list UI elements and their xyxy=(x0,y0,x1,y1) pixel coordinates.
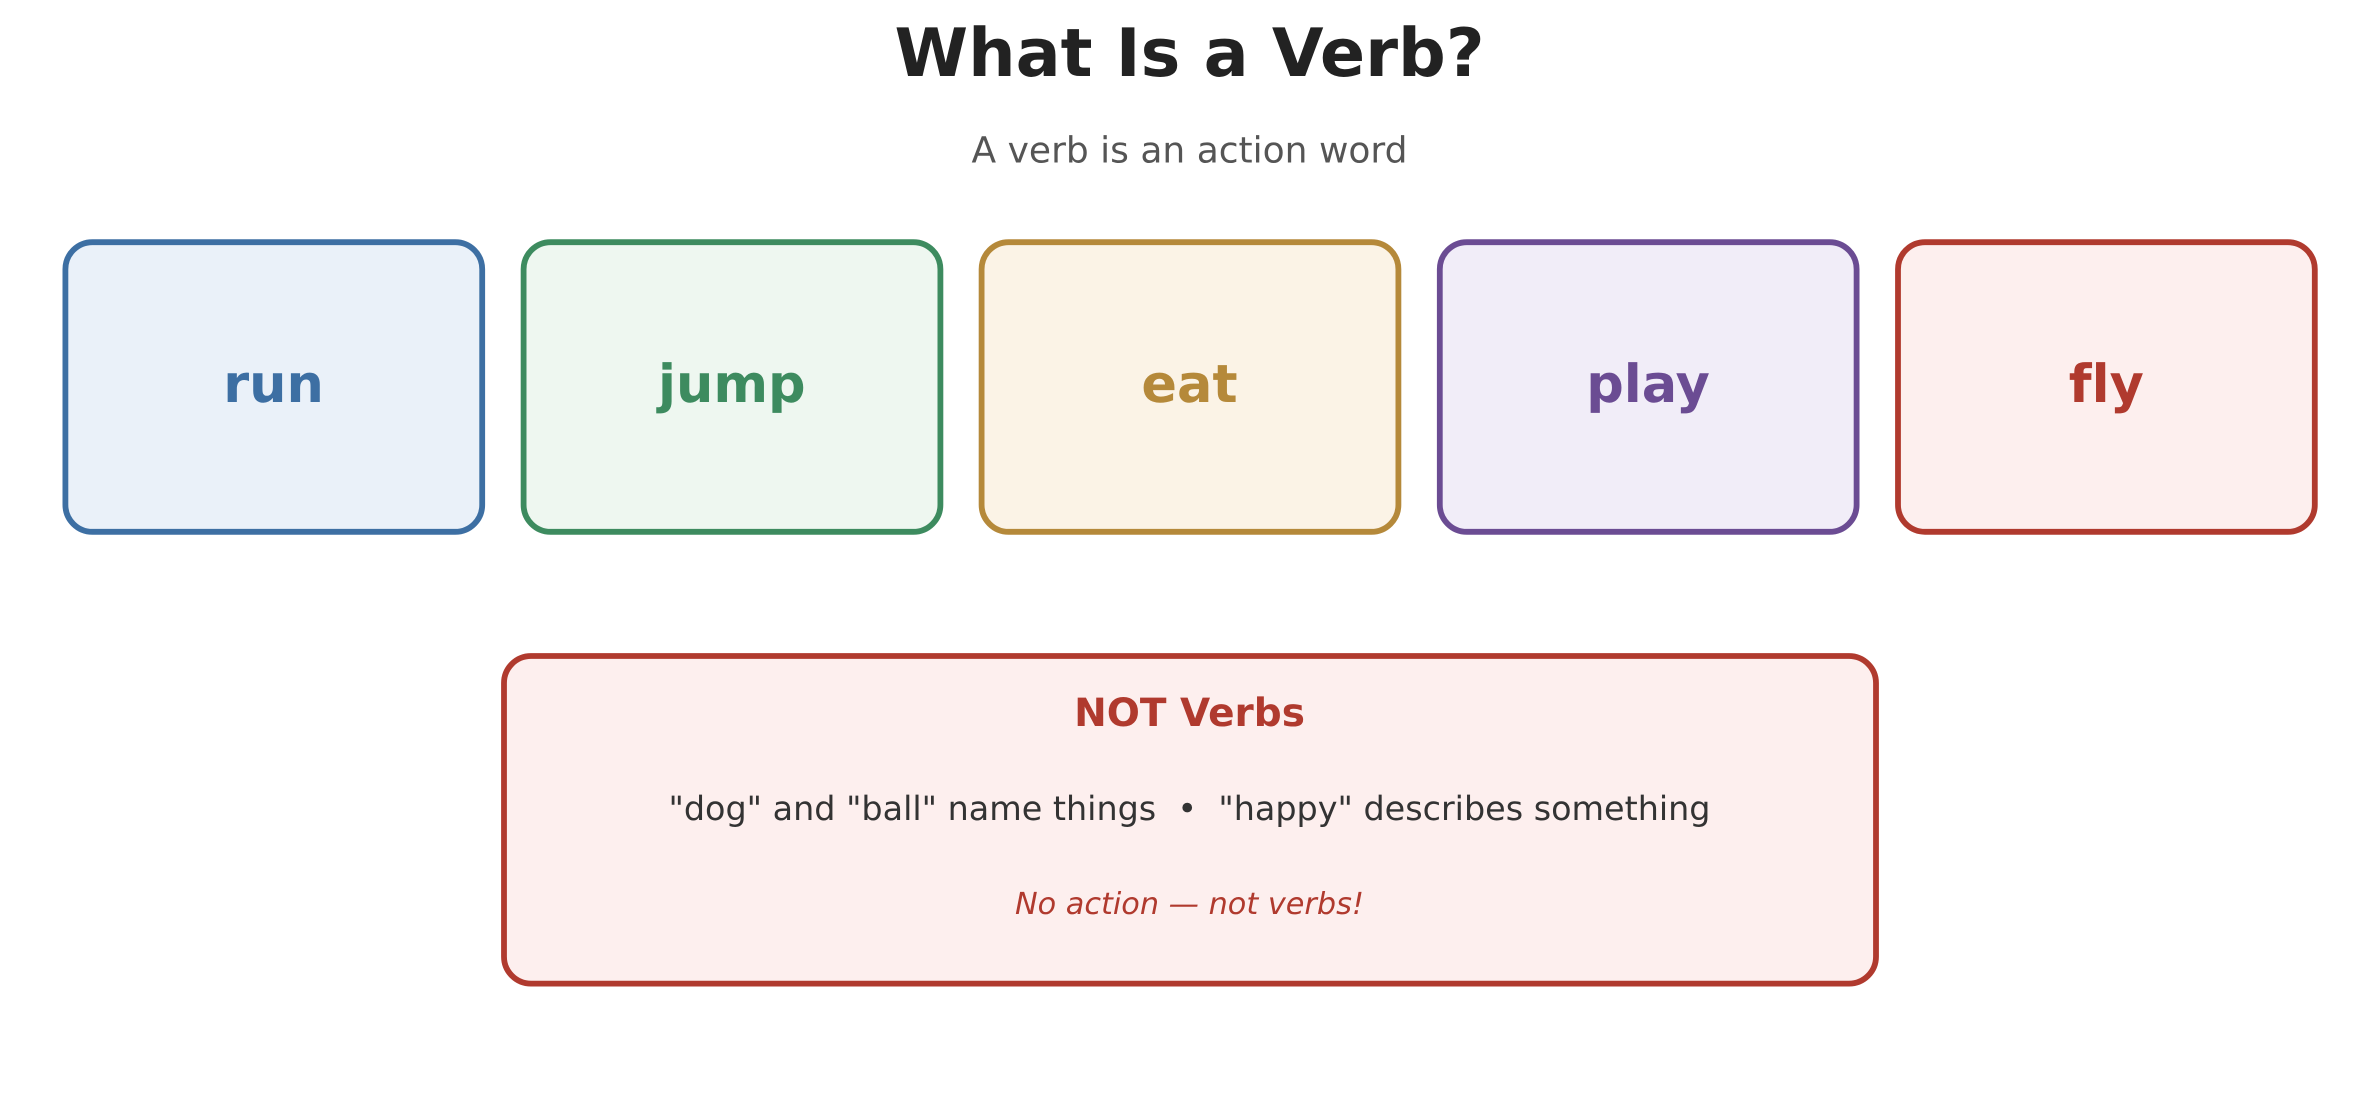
card: run: run xyxy=(223,354,324,415)
title: What Is a Verb? xyxy=(894,14,1485,92)
panel: not verbs xyxy=(504,656,1876,984)
card: run xyxy=(65,242,482,532)
card: jump: jump xyxy=(656,354,806,415)
italic note: No action — not verbs! xyxy=(1015,887,1364,922)
card: play xyxy=(1440,242,1857,532)
card: eat xyxy=(982,242,1398,532)
explanation text: "dog" and "ball" name things • "happy" describes something xyxy=(668,789,1711,828)
subtitle: A verb is an action word xyxy=(972,130,1407,172)
card: play: play xyxy=(1586,354,1710,415)
card: eat: eat xyxy=(1141,354,1238,415)
card: fly xyxy=(1898,242,2315,532)
card: fly: fly xyxy=(2069,354,2144,415)
heading: not verbs: NOT Verbs xyxy=(1074,691,1305,736)
card: jump xyxy=(524,242,940,532)
